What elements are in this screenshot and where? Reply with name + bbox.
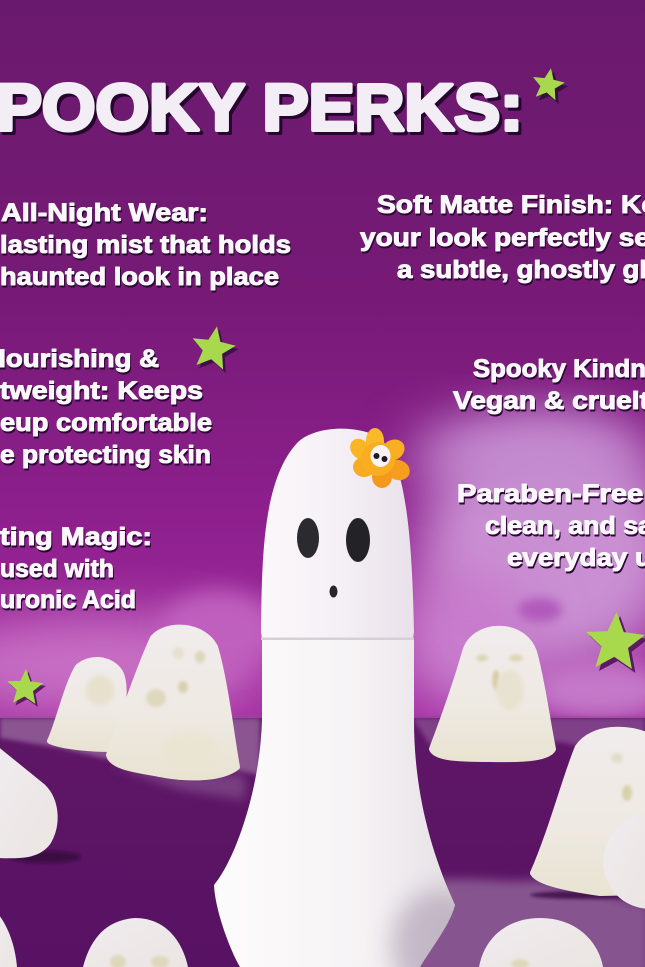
mochi ghost: back left large [109,628,237,777]
ghost bottle [214,428,455,967]
mochi ghost: right front [533,730,645,893]
mochi ghost: right back [432,629,553,759]
skull [370,445,390,467]
perk: paraben-free [457,480,645,572]
right eye [346,518,370,562]
mouth [330,586,338,598]
perk: nourishing and lightweight: eup comfortable [0,409,212,437]
perk: soft matte finish: Soft Matte Finish: Ke [377,191,645,219]
perk: nourishing and lightweight: e protecting skin [0,441,211,469]
perk: soft matte finish [360,191,645,284]
perk: all-night wear: haunted look in place [0,263,279,291]
smoke over bottle base [381,880,455,967]
left eye [297,518,319,558]
bottle body [214,640,455,967]
perk: soft matte finish: a subtle, ghostly gl [397,256,645,284]
star: top right [529,65,571,105]
perk: nourishing and lightweight: tweight: Keeps [0,377,203,405]
seam shadow [261,638,414,640]
bottle cap [261,429,414,638]
mochi ghost: bottom centre left [83,918,188,967]
perk: setting magic: used with [0,555,114,583]
perk: paraben-free: everyday u [507,544,645,572]
star: lower left [6,668,47,707]
mochi ghost: right round [603,813,645,909]
perk: setting magic: uronic Acid [0,586,136,614]
star: middle left [188,323,242,374]
mochi ghost: bottom right [479,918,603,967]
mochi ghost: bottom left sliver [0,910,17,967]
perk: paraben-free: clean, and sa [485,512,645,540]
perk: paraben-free: Paraben-Free: [457,480,645,508]
perk: setting magic [0,523,152,614]
perk: setting magic: ting Magic: [0,523,152,551]
star: lower right [584,610,645,673]
mochi ghost: small back left [50,660,124,749]
perk: all-night wear [0,199,291,291]
perk: all-night wear: lasting mist that holds [0,231,291,259]
perk: soft matte finish: your look perfectly se [360,224,645,252]
perk: spooky kindness: Vegan & cruelt [453,387,645,415]
perk: spooky kindness: Spooky Kindn [473,355,645,383]
mochi ghost: left cropped [0,748,55,855]
floor [0,718,645,967]
perk: spooky kindness [453,355,645,415]
perk: all-night wear: All-Night Wear: [1,199,208,227]
perk: nourishing and lightweight [0,345,212,469]
flower clip [346,428,413,488]
